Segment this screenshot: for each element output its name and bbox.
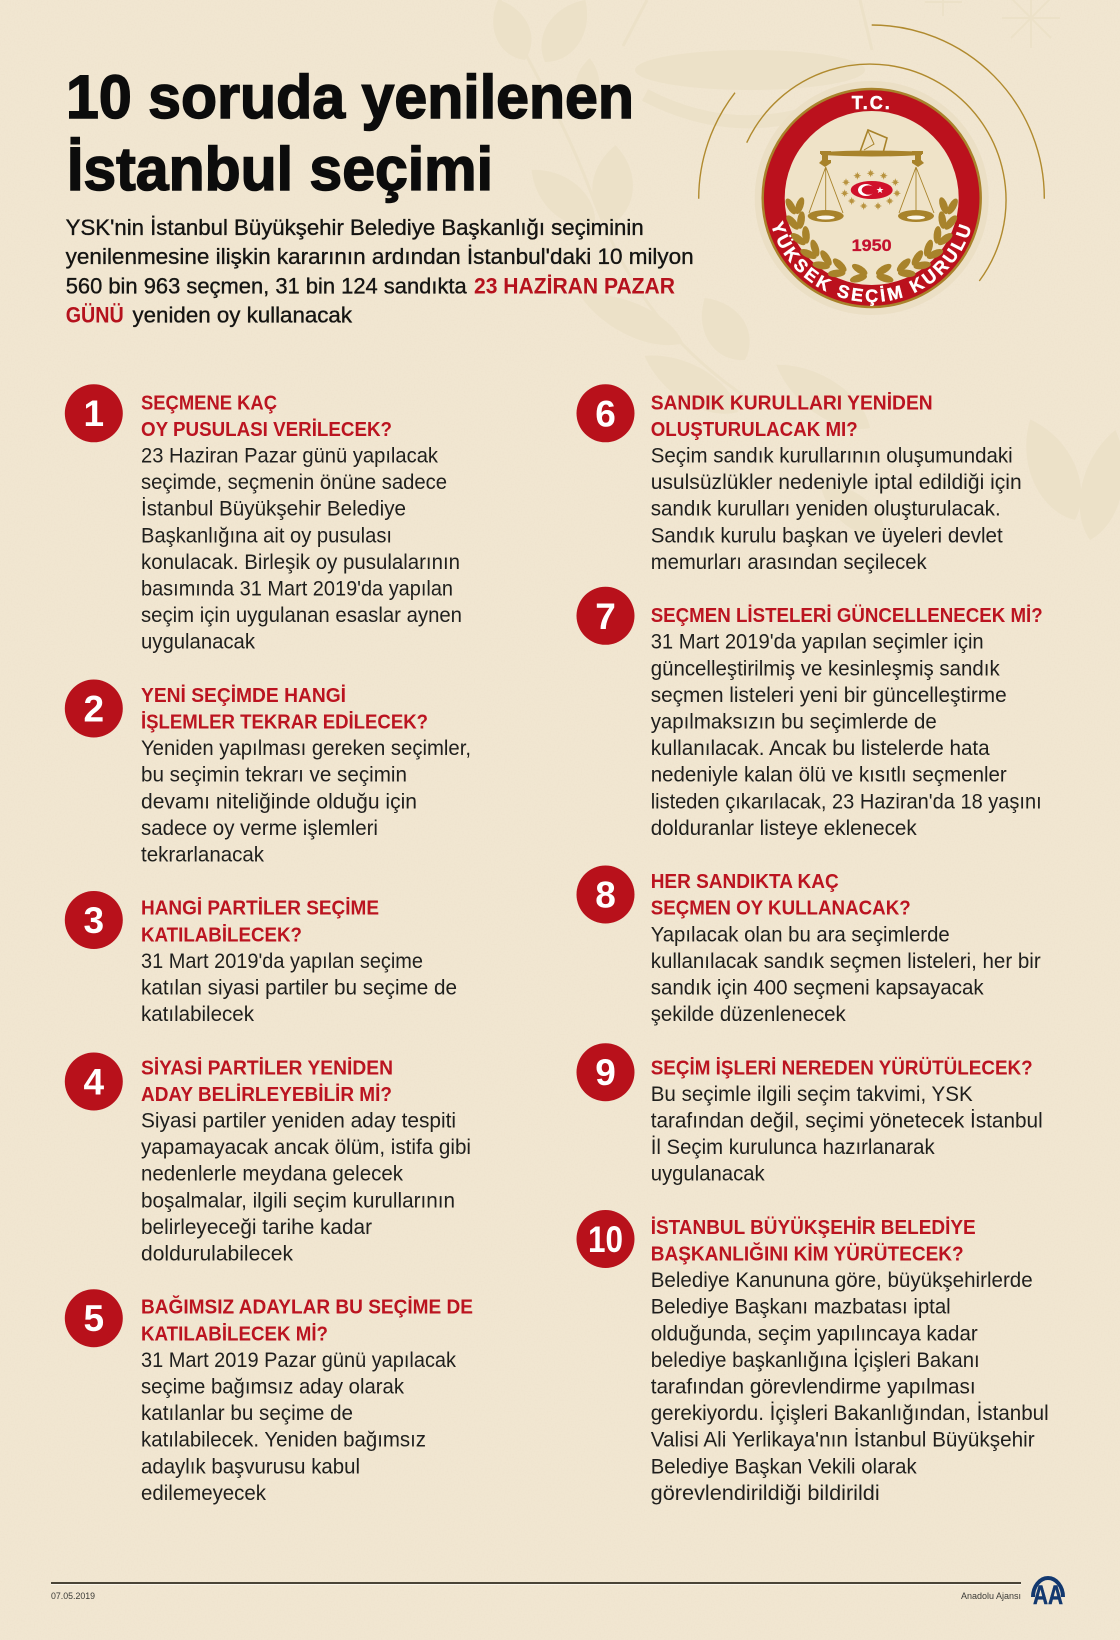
number badge 2 (65, 680, 123, 738)
question 3 heading (141, 897, 379, 946)
question 6 body: sandık kurulları yeniden oluşturulacak. (651, 498, 1001, 521)
number badge 3: 3 (84, 900, 104, 941)
intro text (66, 215, 694, 328)
intro text: yenilenmesine ilişkin kararının ardından İstanbul'daki 10 milyon (66, 244, 694, 269)
question 7 body: kullanılacak. Ancak bu listelerde hata (651, 737, 990, 760)
question 6 body: usulsüzlükler nedeniyle iptal edildiği için (651, 471, 1022, 494)
logo: Yüksek Seçim Kurulu emblem (698, 24, 1045, 315)
question 6 heading: SANDIK KURULLARI YENİDEN (651, 391, 933, 414)
question 4 body: belirleyeceği tarihe kadar (141, 1216, 372, 1239)
question 1 body: seçimde, seçmenin önüne sadece (141, 471, 447, 494)
logo: Yüksek Seçim Kurulu emblem: YÜKSEK SEÇİM KURULU (772, 220, 970, 306)
question 6 heading (651, 391, 933, 441)
intro text: yeniden oy kullanacak (132, 303, 353, 328)
question 2 body: sadece oy verme işlemleri (141, 817, 378, 840)
intro text: GÜNÜ (66, 303, 124, 328)
number badge 8 (576, 866, 634, 924)
number badge 8: 8 (595, 874, 616, 916)
icon: stars (840, 168, 902, 211)
question 1 heading: OY PUSULASI VERİLECEK? (141, 418, 392, 441)
question 1 body: konulacak. Birleşik oy pusulalarının (141, 551, 460, 574)
question 4 heading: ADAY BELİRLEYEBİLİR Mİ? (141, 1083, 392, 1106)
question 4 body (141, 1110, 471, 1266)
title: İstanbul seçimi (67, 135, 493, 203)
question 7 body: nedeniyle kalan ölü ve kısıtlı seçmenler (651, 764, 1007, 787)
question 10 body: Belediye Başkanı mazbatası iptal (651, 1296, 951, 1319)
question 2 (65, 680, 471, 866)
number badge 5: 5 (84, 1298, 104, 1339)
question 1 body: basımında 31 Mart 2019'da yapılan (141, 578, 453, 600)
footer: Anadolu Ajansı (961, 1591, 1021, 1601)
question 6 body (651, 444, 1022, 574)
question 8 body (651, 923, 1041, 1026)
icon: scales (808, 130, 934, 222)
number badge 5 (65, 1289, 123, 1347)
logo: Yüksek Seçim Kurulu emblem: T.C. (852, 93, 892, 113)
question 2 heading (141, 684, 428, 734)
number badge 3 (65, 891, 123, 949)
question 5 body: adaylık başvurusu kabul (141, 1455, 360, 1478)
question 6 heading: OLUŞTURULACAK MI? (651, 419, 858, 441)
question 7 heading: SEÇMEN LİSTELERİ GÜNCELLENECEK Mİ? (651, 604, 1043, 627)
question 1 body: Başkanlığına ait oy pusulası (141, 524, 392, 547)
question 8 heading: HER SANDIKTA KAÇ (651, 871, 839, 893)
number badge 9 (576, 1043, 634, 1101)
question 4 body: yapamayacak ancak ölüm, istifa gibi (141, 1136, 471, 1159)
question 10 body: olduğunda, seçim yapılıncaya kadar (651, 1322, 978, 1345)
number badge 1 (65, 384, 123, 442)
question 3 body: katılabilecek (141, 1003, 254, 1026)
question 7 body: listeden çıkarılacak, 23 Haziran'da 18 yaşını (651, 790, 1042, 813)
question 1 body: seçim için uygulanan esaslar aynen (141, 604, 462, 627)
question 10 body: Belediye Kanununa göre, büyükşehirlerde (651, 1269, 1033, 1292)
icon: Anadolu Ajansı logo: AA (1033, 1580, 1063, 1610)
number badge 10: 10 (588, 1219, 623, 1260)
number badge 4: 4 (84, 1062, 105, 1102)
question 1 body: 23 Haziran Pazar günü yapılacak (141, 444, 438, 468)
question 3 body (141, 950, 457, 1026)
question 4 heading (141, 1056, 393, 1106)
question 9 (576, 1043, 1043, 1186)
icon: flag (851, 181, 893, 199)
question 4 body: doldurulabilecek (141, 1242, 293, 1266)
question 10 heading: İSTANBUL BÜYÜKŞEHİR BELEDİYE (651, 1216, 976, 1239)
question 10 body: tarafından görevlendirme yapılması (651, 1376, 976, 1398)
question 5 (65, 1289, 473, 1505)
title (66, 63, 634, 203)
intro text: 560 bin 963 seçmen, 31 bin 124 sandıkta (66, 273, 467, 298)
number badge 2: 2 (84, 688, 104, 730)
question 9 body: Bu seçimle ilgili seçim takvimi, YSK (651, 1083, 973, 1106)
intro text: 23 HAZİRAN PAZAR (474, 273, 675, 298)
question 3 body: 31 Mart 2019'da yapılan seçime (141, 950, 423, 973)
question 10 body: Belediye Başkan Vekili olarak (651, 1455, 917, 1478)
question 1 heading (141, 392, 392, 441)
question 5 heading: BAĞIMSIZ ADAYLAR BU SEÇİME DE (141, 1295, 473, 1319)
question 1 body (141, 444, 462, 654)
question 10 (576, 1210, 1049, 1505)
question 6 (576, 384, 1022, 574)
question 8 body: şekilde düzenlenecek (651, 1003, 846, 1026)
question 8 heading: SEÇMEN OY KULLANACAK? (651, 898, 911, 920)
number badge 4 (65, 1052, 123, 1110)
question 3 heading: HANGİ PARTİLER SEÇİME (141, 897, 379, 920)
number badge 10 (576, 1210, 634, 1268)
question 5 body: 31 Mart 2019 Pazar günü yapılacak (141, 1349, 456, 1372)
question 5 heading: KATILABİLECEK Mİ? (141, 1322, 328, 1345)
question 1 body: uygulanacak (141, 631, 255, 654)
question 7 body: güncelleştirilmiş ve kesinleşmiş sandık (651, 657, 1000, 680)
question 1 heading: SEÇMENE KAÇ (141, 392, 277, 414)
question 4 body: Siyasi partiler yeniden aday tespiti (141, 1110, 456, 1132)
question 10 body (651, 1269, 1049, 1505)
question 2 body: bu seçimin tekrarı ve seçimin (141, 764, 407, 787)
question 6 body: Sandık kurulu başkan ve üyeleri devlet (651, 524, 1003, 547)
logo: Yüksek Seçim Kurulu emblem: 1950 (852, 236, 892, 255)
question 10 body: görevlendirildiği bildirildi (651, 1482, 880, 1505)
question 5 body: katılanlar bu seçime de (141, 1402, 353, 1425)
number badge 6: 6 (595, 393, 616, 434)
number badge 7 (576, 587, 634, 645)
question 9 body: tarafından değil, seçimi yönetecek İstanbul (651, 1110, 1043, 1132)
question 4 body: nedenlerle meydana gelecek (141, 1163, 403, 1186)
intro text: YSK'nin İstanbul Büyükşehir Belediye Başkanlığı seçiminin (66, 215, 644, 240)
question 10 body: belediye başkanlığına İçişleri Bakanı (651, 1349, 980, 1372)
question 5 heading (141, 1295, 473, 1345)
question 4 body: boşalmalar, ilgili seçim kurullarının (141, 1189, 455, 1212)
question 5 body (141, 1349, 456, 1505)
number badge 1: 1 (84, 393, 104, 434)
question 4 heading: SİYASİ PARTİLER YENİDEN (141, 1056, 393, 1079)
question 5 body: katılabilecek. Yeniden bağımsız (141, 1429, 426, 1452)
question 10 heading (651, 1216, 976, 1266)
question 10 heading: BAŞKANLIĞINI KİM YÜRÜTECEK? (651, 1242, 964, 1266)
question 8 body: sandık için 400 seçmeni kapsayacak (651, 976, 984, 1000)
question 7 body (651, 631, 1042, 840)
question 2 body (141, 737, 471, 866)
question 2 heading: YENİ SEÇİMDE HANGİ (141, 684, 346, 707)
question 10 body: Valisi Ali Yerlikaya'nın İstanbul Büyükşehir (651, 1429, 1035, 1452)
question 8 (576, 866, 1041, 1026)
question 5 body: seçime bağımsız aday olarak (141, 1376, 404, 1398)
question 7 body: yapılmaksızın bu seçimlerde de (651, 710, 937, 734)
question 9 body: İl Seçim kurulunca hazırlanarak (651, 1136, 935, 1159)
question 7 body: 31 Mart 2019'da yapılan seçimler için (651, 631, 984, 654)
question 3 (65, 891, 457, 1026)
question 8 body: kullanılacak sandık seçmen listeleri, her bir (651, 950, 1041, 973)
question 2 body: Yeniden yapılması gereken seçimler, (141, 737, 471, 760)
question 2 body: tekrarlanacak (141, 844, 264, 866)
question 5 body: edilemeyecek (141, 1482, 266, 1505)
footer (51, 1578, 1063, 1610)
question 9 body (651, 1083, 1043, 1186)
question 3 heading: KATILABİLECEK? (141, 923, 302, 946)
footer: 07.05.2019 (51, 1591, 95, 1601)
question 9 heading: SEÇİM İŞLERİ NEREDEN YÜRÜTÜLECEK? (651, 1056, 1033, 1079)
question 7 body: dolduranlar listeye eklenecek (651, 817, 917, 840)
title: 10 soruda yenilenen (66, 63, 634, 131)
question 9 body: uygulanacak (651, 1163, 765, 1186)
question 2 heading: İŞLEMLER TEKRAR EDİLECEK? (141, 710, 428, 734)
question 10 body: gerekiyordu. İçişleri Bakanlığından, İstanbul (651, 1402, 1049, 1425)
question 7 body: seçmen listeleri yeni bir güncelleştirme (651, 684, 1007, 707)
question 1 body: İstanbul Büyükşehir Belediye (141, 498, 406, 521)
question 7 (576, 587, 1043, 840)
number badge 7: 7 (595, 596, 616, 637)
question 8 heading (651, 871, 911, 920)
number badge 6 (576, 384, 634, 442)
number badge 9: 9 (595, 1052, 616, 1093)
question 3 body: katılan siyasi partiler bu seçime de (141, 976, 457, 1000)
question 2 body: devamı niteliğinde olduğu için (141, 790, 417, 813)
question 8 body: Yapılacak olan bu ara seçimlerde (651, 923, 950, 946)
question 4 (65, 1052, 471, 1266)
wreath (783, 195, 960, 287)
question 6 body: Seçim sandık kurullarının oluşumundaki (651, 444, 1013, 468)
question 6 body: memurları arasından seçilecek (651, 551, 927, 574)
question 1 (65, 384, 462, 654)
